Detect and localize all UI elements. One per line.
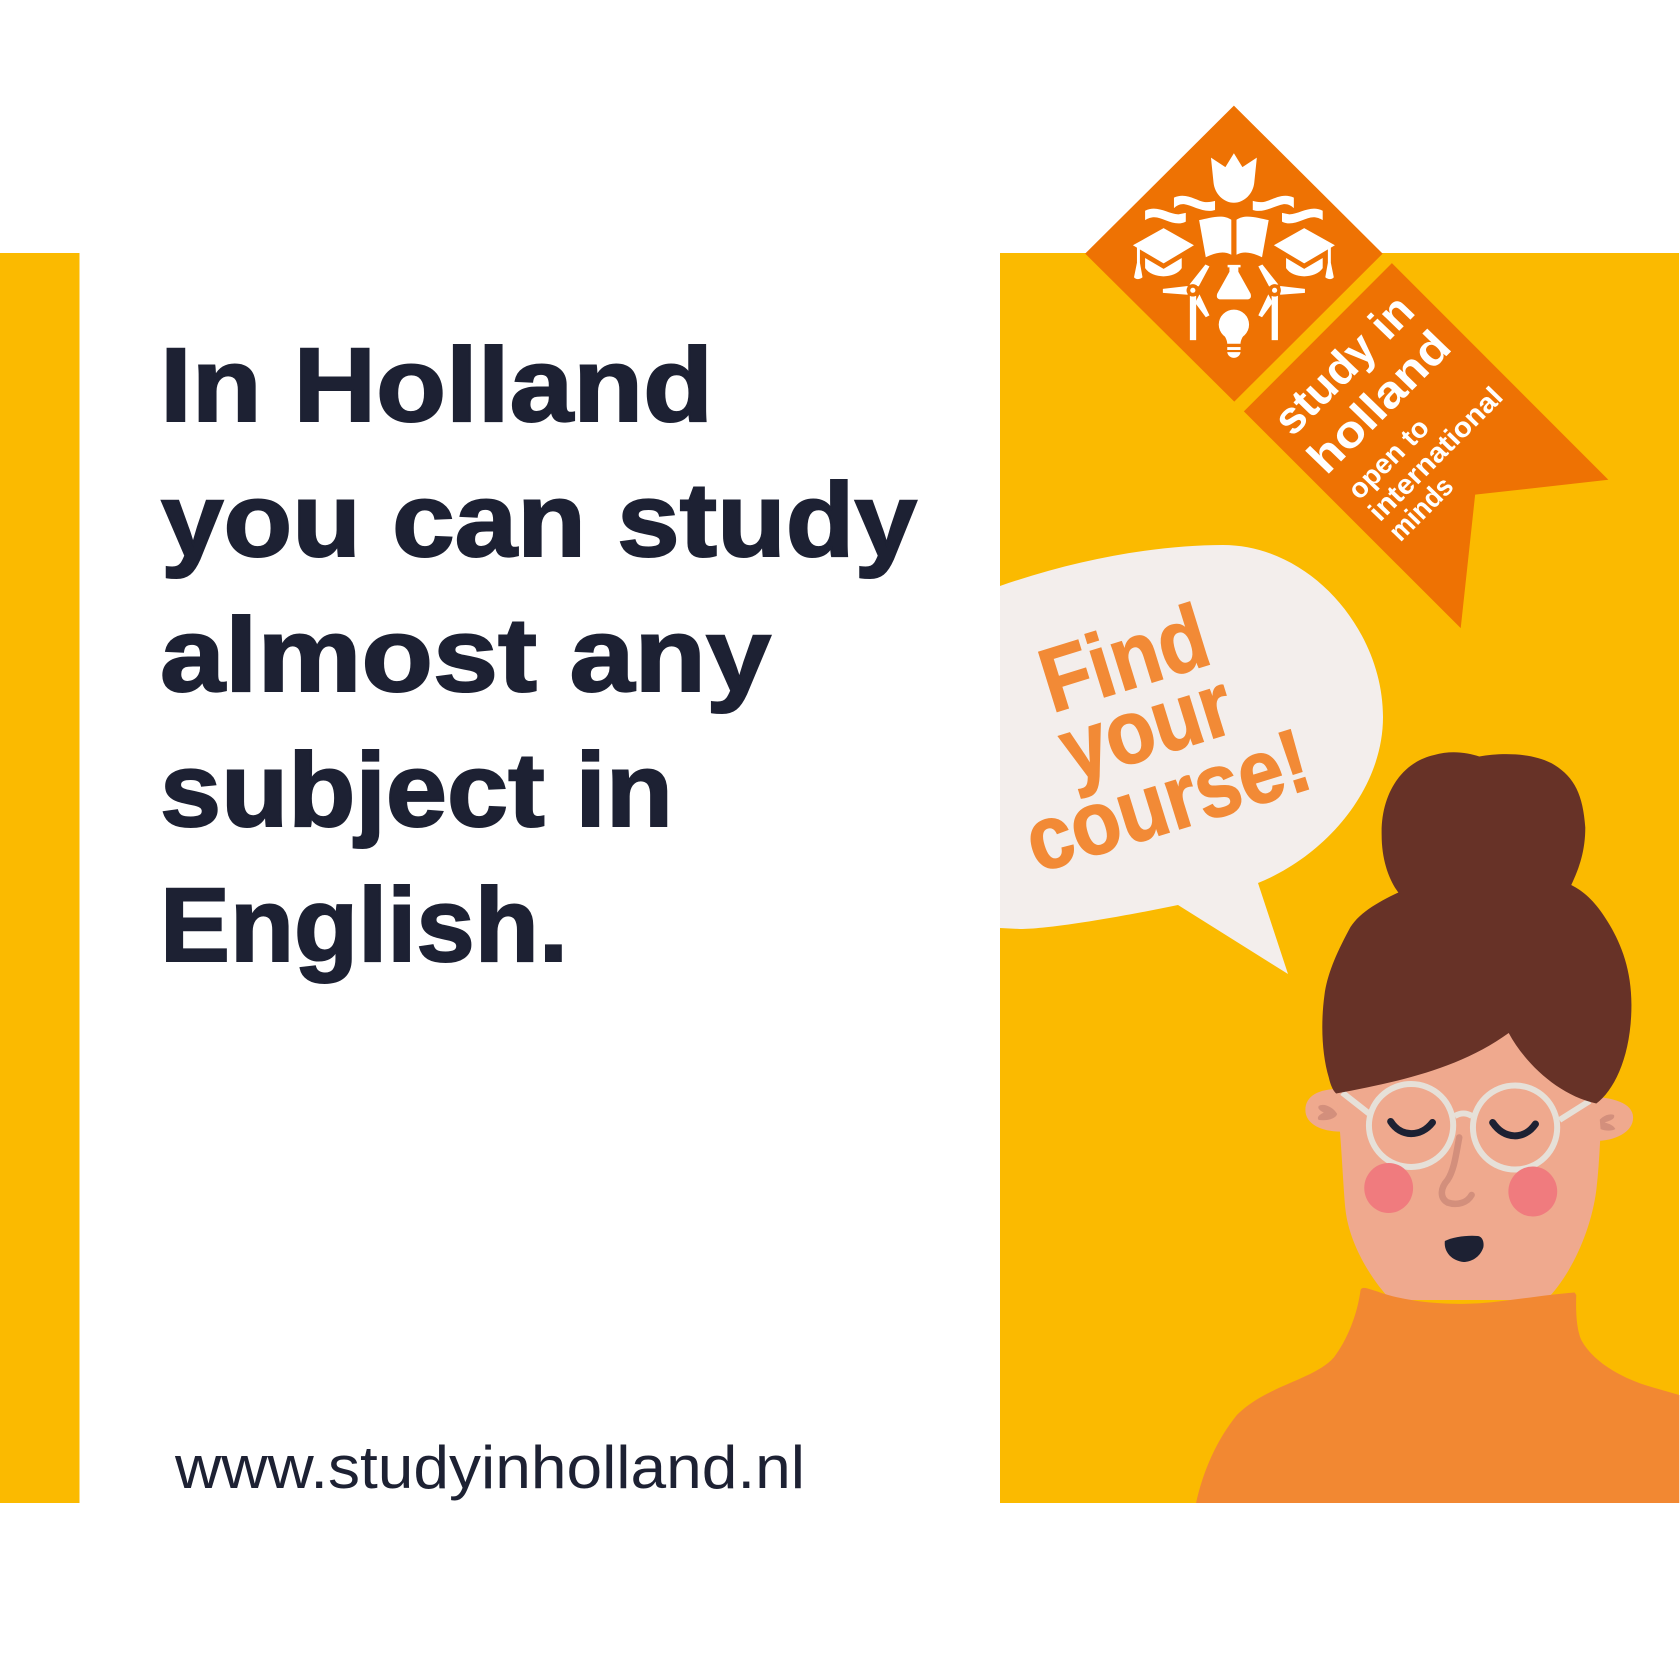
right yellow panel <box>1000 253 1679 1503</box>
left yellow bar <box>0 253 80 1503</box>
sweater <box>1196 1288 1679 1503</box>
logo ribbon text: open to <box>1341 412 1435 505</box>
speech bubble <box>1000 545 1383 974</box>
face <box>1336 1030 1601 1300</box>
logo ribbon <box>1244 263 1608 628</box>
glasses <box>1369 1084 1557 1170</box>
mouth <box>1445 1236 1484 1262</box>
closed eyes <box>1391 1122 1535 1136</box>
speech bubble text: course! <box>1013 710 1322 892</box>
logo ribbon text: study in <box>1263 285 1424 445</box>
ears <box>1305 1089 1633 1141</box>
ear details <box>1318 1105 1615 1131</box>
headline: almost any <box>160 597 771 714</box>
logo ribbon text: international <box>1362 381 1509 527</box>
headline: subject in <box>160 732 673 849</box>
glasses arms <box>1342 1092 1590 1120</box>
logo: study in holland <box>1085 106 1608 628</box>
logo ribbon text: minds <box>1382 471 1459 547</box>
website url: www.studyinholland.nl <box>174 1434 805 1501</box>
speech bubble text <box>1013 586 1322 892</box>
headline <box>160 327 917 984</box>
woman illustration <box>1196 752 1679 1503</box>
logo diamond <box>1085 106 1383 402</box>
headline: English. <box>160 867 568 984</box>
headline: In Holland <box>160 327 713 444</box>
cheeks <box>1364 1163 1557 1216</box>
headline: you can study <box>161 462 917 579</box>
nose <box>1442 1138 1472 1204</box>
logo ribbon text: holland <box>1297 321 1461 483</box>
speech bubble text: your <box>1048 654 1244 801</box>
speech bubble text: Find <box>1028 586 1220 732</box>
logo ribbon text <box>1263 285 1509 547</box>
hair <box>1322 752 1631 1104</box>
logo icons <box>1133 153 1335 358</box>
